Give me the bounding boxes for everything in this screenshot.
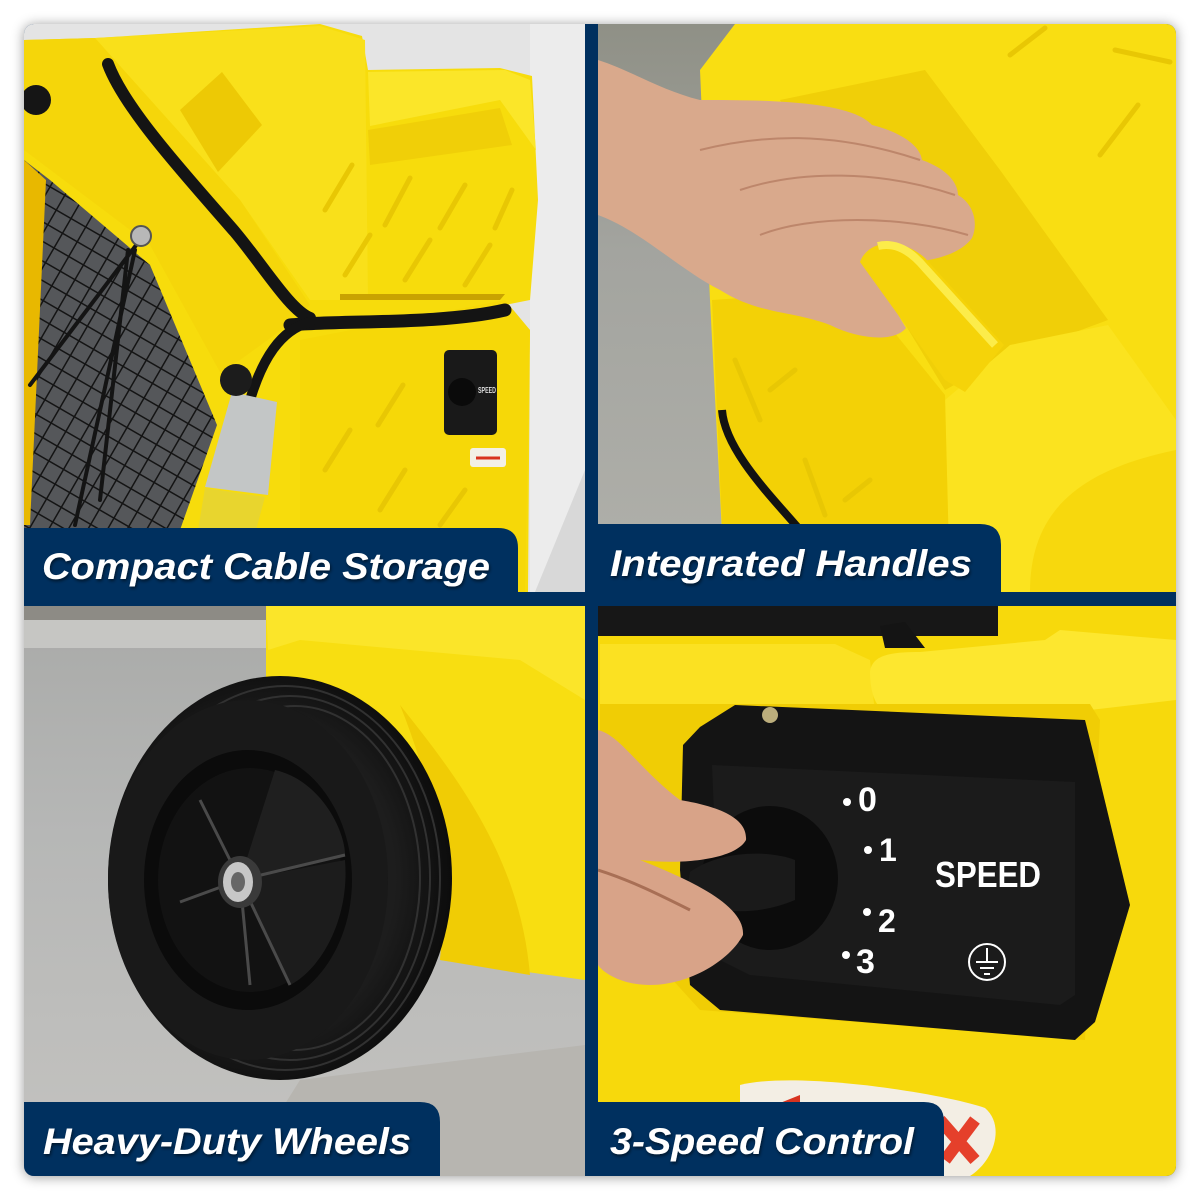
plug bbox=[205, 392, 277, 495]
dividers bbox=[585, 24, 598, 1176]
hand bbox=[598, 60, 975, 337]
panel: compact cable storage photo bbox=[21, 24, 585, 592]
label: 3-speed control bbox=[585, 1102, 944, 1176]
panel: integrated handles photo bbox=[598, 24, 1176, 592]
machine body bbox=[24, 24, 538, 592]
speed dial labels: 2 bbox=[878, 903, 896, 939]
bolts bbox=[21, 85, 51, 115]
switch box bbox=[444, 350, 497, 435]
panel: compact cable storage photo: SPEED bbox=[478, 386, 496, 395]
finger bbox=[598, 730, 746, 985]
speed dial labels: SPEED bbox=[935, 854, 1041, 895]
warning sticker bbox=[740, 1080, 996, 1176]
panel: heavy-duty wheels photo bbox=[24, 606, 585, 1176]
machine body bbox=[700, 24, 1176, 524]
label: 3-speed control: 3-Speed Control bbox=[610, 1121, 915, 1162]
mesh bbox=[24, 160, 217, 530]
label: integrated handles: Integrated Handles bbox=[610, 543, 972, 584]
label: integrated handles bbox=[585, 524, 1001, 592]
speed dial labels: 0 bbox=[858, 781, 877, 819]
machine body bbox=[266, 606, 585, 980]
panel: 3-speed control photo bbox=[598, 606, 1176, 1176]
tread marks bbox=[325, 165, 512, 525]
icon: earth symbol bbox=[969, 944, 1005, 980]
label: heavy-duty wheels: Heavy-Duty Wheels bbox=[43, 1121, 411, 1162]
speed dial labels: 1 bbox=[879, 832, 897, 868]
speed dial labels bbox=[842, 781, 1041, 981]
label: compact cable storage bbox=[24, 528, 518, 592]
wheel bbox=[108, 676, 452, 1080]
speed dial labels: 3 bbox=[856, 943, 875, 981]
cable bbox=[722, 410, 800, 530]
warning sticker bbox=[470, 448, 506, 467]
control box bbox=[680, 705, 1130, 1040]
label: compact cable storage: Compact Cable Storage bbox=[42, 546, 490, 587]
dial knob bbox=[702, 806, 838, 950]
handle bbox=[860, 245, 990, 392]
cable bbox=[30, 64, 505, 525]
label: heavy-duty wheels bbox=[24, 1102, 440, 1176]
